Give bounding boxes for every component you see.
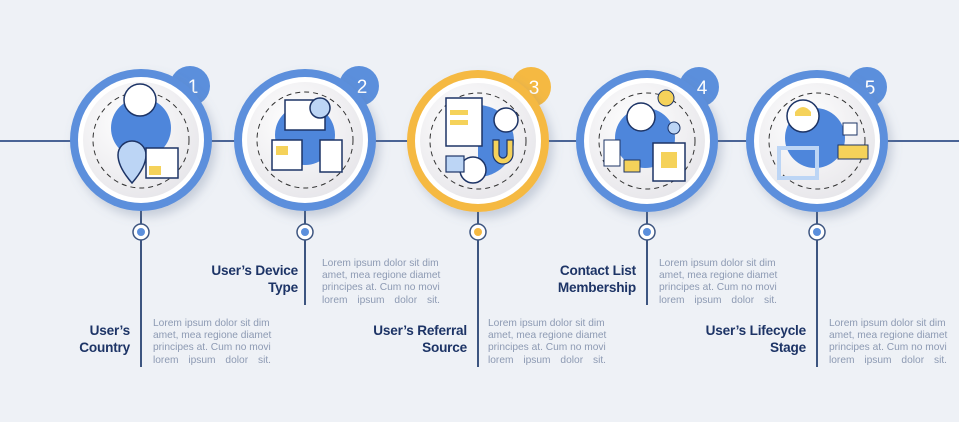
step 4 circle: 4 [697, 78, 708, 99]
desc 1: lorem ipsum dolor sit. [153, 355, 271, 366]
desc 4: amet, mea regione diamet [659, 270, 777, 281]
title 1 [79, 323, 130, 355]
step 3 circle: 3 [529, 78, 539, 99]
desc 1: Lorem ipsum dolor sit dim [153, 318, 270, 329]
step 2 circle [234, 66, 379, 240]
desc 2: lorem ipsum dolor sit. [322, 295, 440, 306]
desc 3 [488, 318, 606, 366]
title 2: Type [268, 280, 298, 295]
desc 4: lorem ipsum dolor sit. [659, 295, 777, 306]
desc 3: Lorem ipsum dolor sit dim [488, 318, 605, 329]
desc 4 [659, 258, 778, 306]
desc 2 [322, 258, 440, 306]
title 1: Country [79, 340, 130, 355]
title 5: User’s Lifecycle [706, 323, 806, 338]
desc 2: Lorem ipsum dolor sit dim [322, 258, 439, 269]
desc 5: amet, mea regione diamet [829, 330, 947, 341]
connectors [141, 205, 817, 367]
step 2 circle: 2 [357, 77, 367, 98]
step 1 circle: 1 [188, 77, 198, 98]
desc 3: principes at. Cum no movi [488, 342, 606, 353]
title 2: User’s Device [211, 263, 298, 278]
desc 4: Lorem ipsum dolor sit dim [659, 258, 776, 269]
title 1: User’s [90, 323, 130, 338]
title 4: Contact List [560, 263, 636, 278]
title 5 [706, 323, 806, 355]
desc 1: principes at. Cum no movi [153, 342, 271, 353]
step 4 circle [576, 67, 719, 240]
desc 5: Lorem ipsum dolor sit dim [829, 318, 946, 329]
desc 3: lorem ipsum dolor sit. [488, 355, 606, 366]
title 2 [211, 263, 298, 295]
desc 5: principes at. Cum no movi [829, 342, 947, 353]
step 1 circle [70, 66, 212, 240]
desc 1 [153, 318, 272, 366]
title 5: Stage [770, 340, 806, 355]
desc 5: lorem ipsum dolor sit. [829, 355, 947, 366]
step 5 circle: 5 [865, 78, 875, 99]
desc 4: principes at. Cum no movi [659, 282, 777, 293]
title 3: Source [422, 340, 467, 355]
timeline line [0, 140, 959, 142]
desc 5 [829, 318, 948, 366]
title 3: User’s Referral [373, 323, 467, 338]
title 4 [558, 263, 636, 295]
title 4: Membership [558, 280, 636, 295]
step 3 circle [407, 67, 551, 240]
desc 2: principes at. Cum no movi [322, 282, 440, 293]
desc 2: amet, mea regione diamet [322, 270, 440, 281]
desc 1: amet, mea regione diamet [153, 330, 271, 341]
desc 3: amet, mea regione diamet [488, 330, 606, 341]
title 3 [373, 323, 467, 355]
step 5 circle [746, 67, 888, 240]
